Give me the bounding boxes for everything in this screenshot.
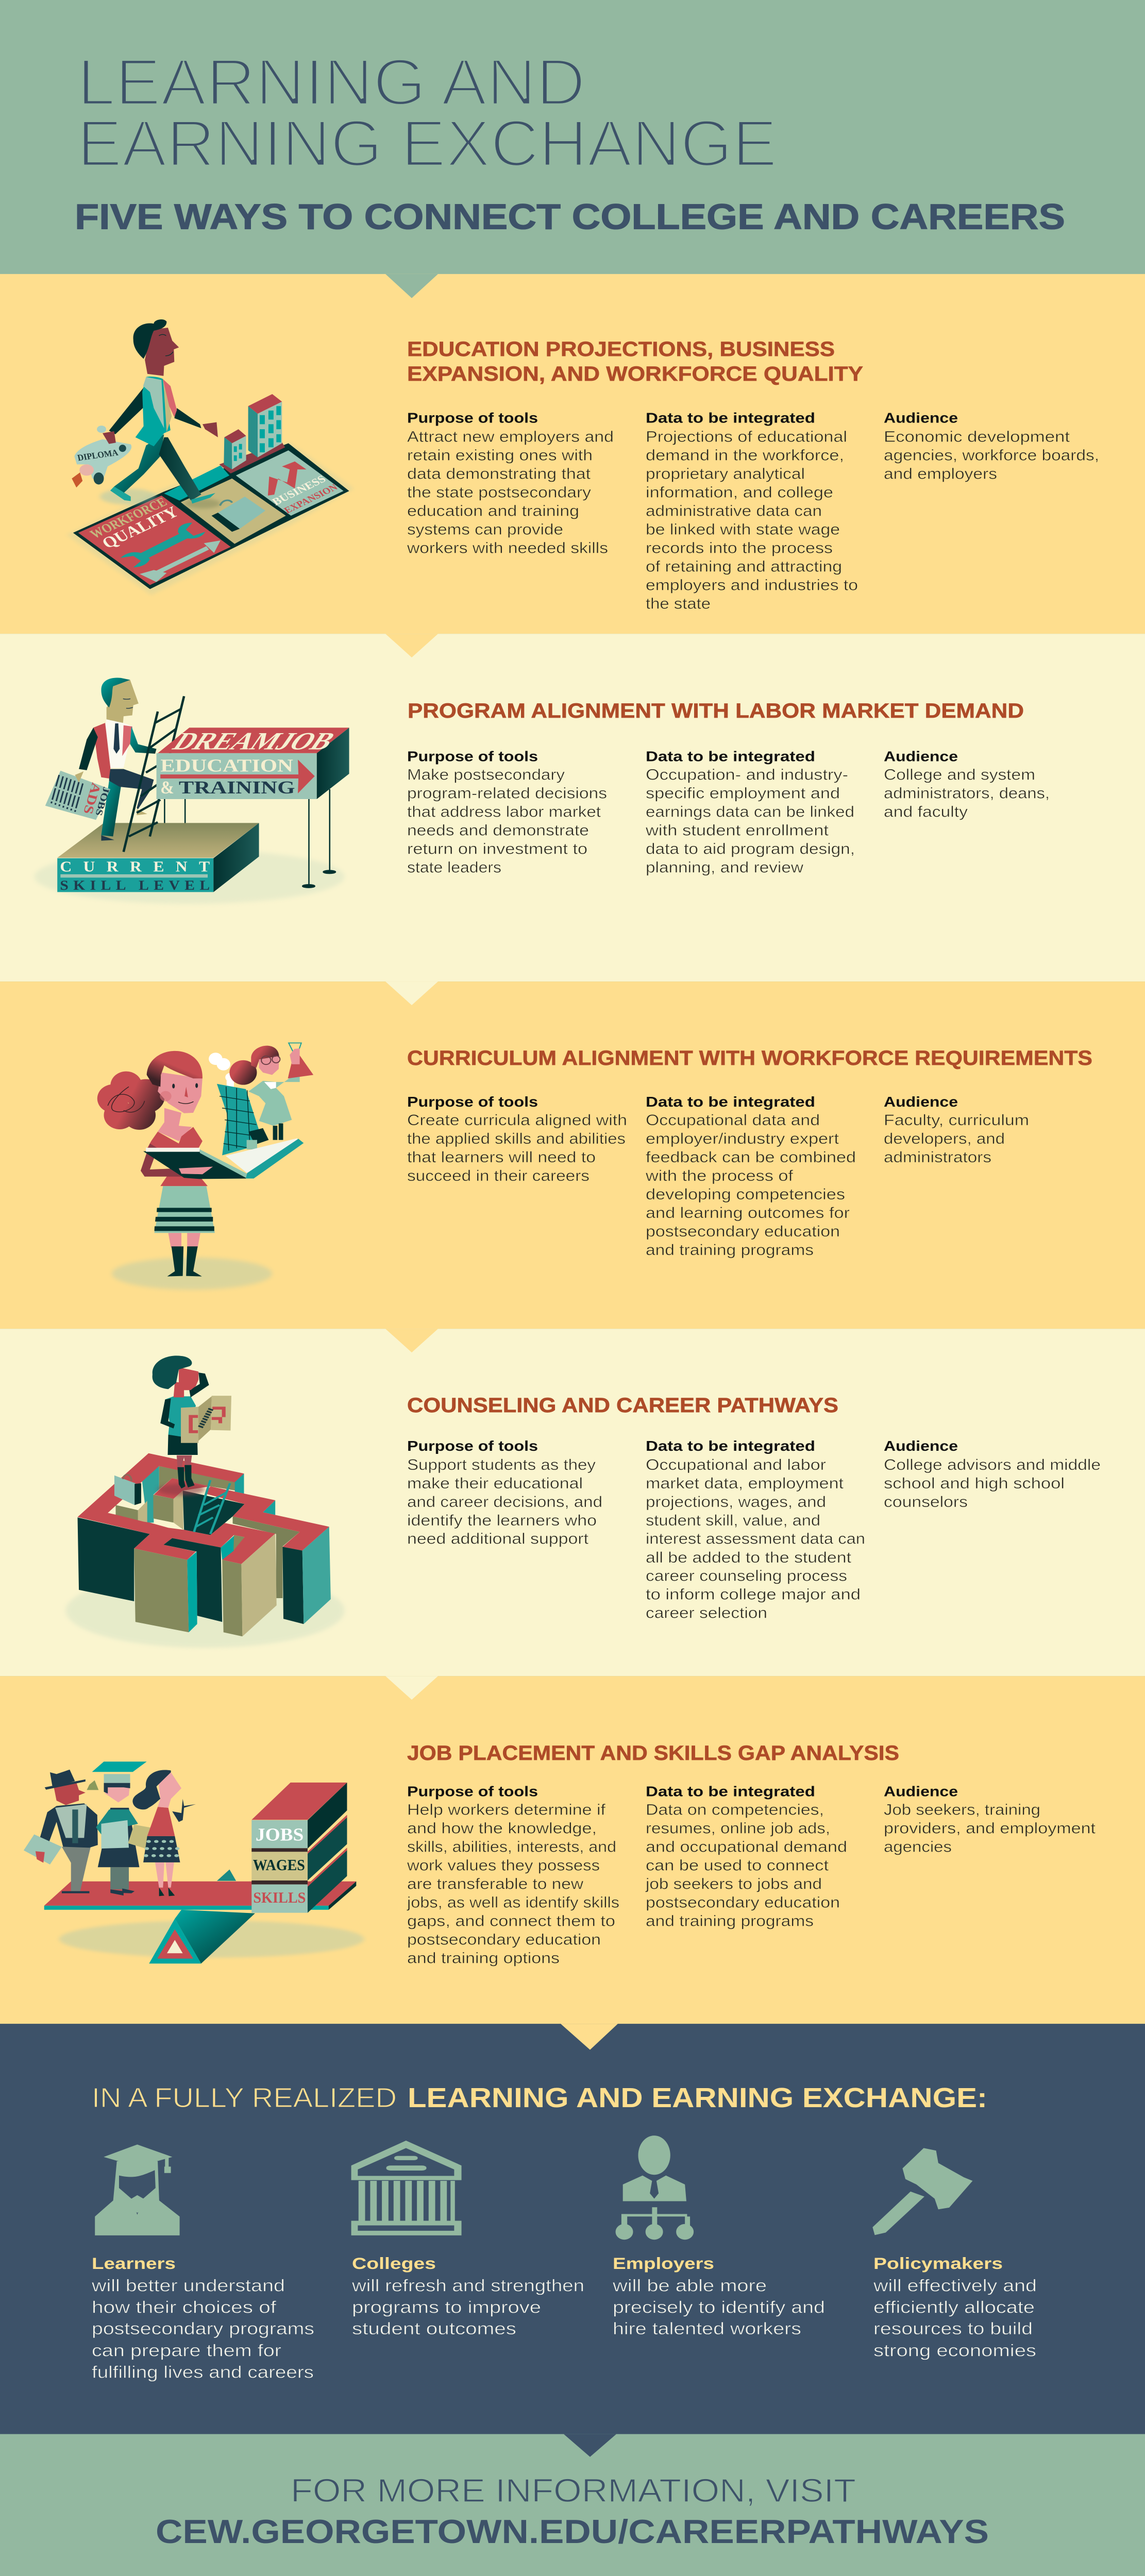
learners text: Learners: [92, 2255, 176, 2273]
section 2 column: data to be integrated: with student enrollment: [645, 822, 829, 839]
section 3 column: audience: administrators: [884, 1149, 991, 1166]
colleges text: student outcomes: [352, 2319, 516, 2338]
colleges text: will refresh and strengthen: [351, 2276, 584, 2295]
section 5 column: purpose of tools: Help workers determine if: [407, 1801, 605, 1818]
icon: employer: [616, 2136, 694, 2240]
panel: section 3 background: [0, 981, 1145, 1329]
section 4 column: purpose of tools: make their educational: [407, 1475, 583, 1492]
section 3 column: audience: Audience: [884, 1094, 958, 1110]
employers text: hire talented workers: [613, 2319, 801, 2338]
section 1 column: data to be integrated: information, and college: [646, 484, 833, 501]
policymakers text: [873, 2255, 1037, 2360]
board text: workforce quality: WORKFORCE: [87, 495, 170, 541]
title: EARNING EXCHANGE: [77, 107, 777, 180]
section 5 column: data to be integrated: job seekers to jobs and: [645, 1875, 822, 1892]
section 4 column: purpose of tools: and career decisions, and: [407, 1493, 602, 1510]
section 2 column: purpose of tools: Make postsecondary: [407, 766, 565, 783]
section 1 column: data to be integrated: [646, 410, 858, 612]
stacked blocks: jobs, wages, skills: [251, 1783, 347, 1913]
section 3 column: data to be integrated: Data to be integrated: [646, 1094, 815, 1110]
section 5 column: data to be integrated: can be used to connect: [646, 1857, 829, 1874]
section 3 column: data to be integrated: and learning outcomes for: [646, 1205, 850, 1222]
icon: college: [351, 2141, 462, 2235]
stacked blocks: jobs, wages, skills: WAGES: [253, 1856, 305, 1874]
section 2 column: data to be integrated: data to aid program design,: [646, 840, 855, 857]
section 5 column: data to be integrated: Data on competencies,: [646, 1801, 824, 1818]
section 1 column: purpose of tools: [407, 410, 614, 556]
section 3 column: data to be integrated: employer/industry expert: [646, 1130, 839, 1147]
section 3 column: audience: [884, 1094, 1029, 1166]
board text: business expansion: [268, 462, 340, 516]
section 4 column: data to be integrated: career counseling process: [646, 1567, 847, 1584]
section 4 column: audience: school and high school: [884, 1475, 1065, 1492]
section 4 column: data to be integrated: market data, employment: [646, 1475, 844, 1492]
panel: footer background: [0, 2434, 1145, 2576]
section 5 column: audience: agencies: [884, 1838, 952, 1855]
section 3 heading: CURRICULUM ALIGNMENT WITH WORKFORCE REQUIREMENTS: [407, 1046, 1092, 1070]
section 1 column: purpose of tools: the state postsecondary: [407, 484, 591, 501]
section 2 heading: PROGRAM ALIGNMENT WITH LABOR MARKET DEMAND: [408, 699, 1024, 722]
section 3 column: purpose of tools: that learners will need to: [407, 1149, 596, 1166]
section 1 column: data to be integrated: demand in the workforce,: [646, 447, 844, 464]
section 5 column: purpose of tools: postsecondary education: [407, 1931, 601, 1948]
arrow: header to section 1: [385, 274, 438, 298]
section 1 column: data to be integrated: of retaining and attracting: [646, 558, 842, 575]
figure: woman: [97, 1051, 215, 1277]
section 1 column: data to be integrated: be linked with state wage: [646, 521, 840, 538]
section 4 column: purpose of tools: Support students as they: [407, 1456, 596, 1473]
section 4 column: data to be integrated: [646, 1438, 865, 1621]
skill level platform: SKILL LEVEL: [60, 878, 210, 893]
section 2 column: purpose of tools: return on investment to: [407, 840, 587, 857]
section 3 column: purpose of tools: Purpose of tools: [407, 1094, 538, 1110]
figure: small scientist: [229, 1043, 313, 1140]
exchange panel heading: LEARNING AND EARNING EXCHANGE:: [408, 2082, 987, 2113]
board text: business expansion: EXPANSION: [282, 482, 340, 516]
section 4 column: purpose of tools: Purpose of tools: [407, 1438, 538, 1454]
section 1 column: audience: and employers: [884, 465, 997, 482]
section 2 column: purpose of tools: needs and demonstrate: [407, 822, 589, 839]
section 2 column: audience: College and system: [884, 766, 1035, 783]
section 4 column: data to be integrated: all be added to the student: [646, 1549, 851, 1566]
section 4 column: audience: College advisors and middle: [884, 1456, 1101, 1473]
section 5 column: audience: Audience: [884, 1784, 958, 1800]
arrow: section 5 to exchange panel: [561, 2024, 618, 2050]
skill level platform: [57, 823, 259, 893]
section 1 column: audience: [884, 410, 1099, 482]
game board: [73, 442, 349, 589]
section 1 column: audience: Audience: [884, 410, 958, 426]
section 5 column: purpose of tools: work values they possess: [407, 1857, 600, 1874]
figure: graduate: [87, 1761, 169, 1895]
section 1 column: purpose of tools: workers with needed skills: [407, 539, 608, 556]
section 2 column: purpose of tools: that address labor market: [407, 803, 601, 820]
section 4 column: audience: [884, 1438, 1101, 1510]
icon: gavel: [872, 2148, 972, 2235]
section 1 column: data to be integrated: records into the process: [646, 539, 833, 556]
section 3 column: data to be integrated: Occupational data and: [646, 1112, 820, 1129]
employers text: precisely to identify and: [613, 2298, 825, 2317]
figure: woman with bag: [132, 1770, 196, 1896]
colleges text: Colleges: [352, 2255, 436, 2273]
section 4 column: data to be integrated: interest assessment data can: [646, 1530, 865, 1547]
policymakers text: strong economies: [873, 2341, 1036, 2360]
section 5 heading: JOB PLACEMENT AND SKILLS GAP ANALYSIS: [407, 1741, 899, 1765]
stacked blocks: jobs, wages, skills: JOBS: [256, 1825, 304, 1844]
section 5 column: purpose of tools: [407, 1784, 619, 1967]
section 3 column: data to be integrated: developing competencies: [646, 1186, 845, 1203]
icon: learner: [95, 2144, 180, 2235]
section 3 column: data to be integrated: with the process of: [645, 1167, 793, 1184]
policymakers text: resources to build: [873, 2319, 1033, 2338]
arrow: section 4 to section 5: [385, 1676, 438, 1700]
section 1 column: data to be integrated: employers and industries to: [646, 577, 858, 594]
ladder: [194, 1480, 230, 1534]
illustration: woman with map on maze: [66, 1355, 344, 1648]
section 3 column: audience: developers, and: [884, 1130, 1005, 1147]
section 4 column: data to be integrated: projections, wages, and: [646, 1493, 826, 1510]
subtitle: FIVE WAYS TO CONNECT COLLEGE AND CAREERS: [75, 197, 1065, 237]
open book: [143, 1138, 304, 1179]
section 1 column: audience: agencies, workforce boards,: [884, 447, 1099, 464]
learners text: postsecondary programs: [92, 2319, 314, 2338]
panel: section 4 background: [0, 1329, 1145, 1676]
section 1 heading: [407, 337, 863, 385]
section 3 column: data to be integrated: postsecondary education: [646, 1223, 840, 1240]
dream job sign: DREAMJOB: [167, 728, 341, 755]
section 2 column: data to be integrated: [645, 749, 855, 876]
employers text: [612, 2255, 825, 2338]
dream job sign: &: [160, 777, 174, 798]
section 2 column: audience: [884, 749, 1050, 820]
ground shadow: [66, 1573, 344, 1648]
policymakers text: will effectively and: [873, 2276, 1037, 2295]
learners text: how their choices of: [92, 2298, 276, 2317]
arrow: section 2 to section 3: [385, 981, 438, 1005]
section 2 column: purpose of tools: state leaders: [407, 859, 501, 876]
exchange panel heading: IN A FULLY REALIZED: [92, 2082, 397, 2113]
section 1 column: data to be integrated: Projections of educational: [646, 428, 847, 445]
section 5 column: purpose of tools: Purpose of tools: [407, 1784, 538, 1800]
panel: section 5 background: [0, 1676, 1145, 2024]
section 1 column: purpose of tools: Attract new employers and: [407, 428, 614, 445]
learners text: can prepare them for: [92, 2341, 281, 2360]
figure: walking man: [72, 319, 221, 509]
section 1 column: data to be integrated: the state: [646, 595, 711, 612]
section 3 column: purpose of tools: succeed in their careers: [407, 1167, 590, 1184]
icon: briefcase: [211, 497, 265, 532]
ground shadow: [112, 1258, 272, 1290]
learners text: [91, 2255, 314, 2382]
section 1 column: purpose of tools: systems can provide: [407, 521, 563, 538]
panel: section 1 background: [0, 274, 1145, 634]
section 4 column: data to be integrated: Occupational and labor: [646, 1456, 826, 1473]
panel: section 2 background: [0, 634, 1145, 981]
header panel: [0, 0, 1145, 274]
section 1 column: purpose of tools: retain existing ones with: [407, 447, 593, 464]
panel: fully realized exchange background: [0, 2024, 1145, 2434]
section 5 column: audience: Job seekers, training: [884, 1801, 1040, 1818]
arrow: exchange panel to footer: [564, 2434, 616, 2457]
section 5 column: purpose of tools: jobs, as well as identify skills: [407, 1894, 619, 1911]
section 2 column: data to be integrated: Occupation- and industry-: [646, 766, 848, 783]
section 1 column: data to be integrated: administrative data can: [646, 502, 822, 519]
icon: briefcase: [114, 1475, 141, 1505]
colleges text: programs to improve: [352, 2298, 541, 2317]
figure: man with job ads: JOBS: [93, 786, 112, 817]
illustration: people balancing jobs wages skills: [24, 1761, 364, 1963]
policymakers text: Policymakers: [873, 2255, 1003, 2273]
section 3 column: data to be integrated: feedback can be combined: [646, 1149, 856, 1166]
icon: buildings: [224, 394, 282, 469]
section 2 column: purpose of tools: Purpose of tools: [407, 749, 538, 765]
section 1 column: data to be integrated: proprietary analytical: [646, 465, 805, 482]
illustration: woman with open book: [97, 1043, 313, 1290]
ground shadow: [59, 1921, 364, 1958]
arrow: section 1 to section 2: [385, 634, 438, 657]
figure: woman with map: [153, 1355, 231, 1495]
section 4 column: data to be integrated: to inform college major and: [646, 1586, 861, 1603]
section 4 column: audience: Audience: [884, 1438, 958, 1454]
maze blocks: [78, 1453, 331, 1636]
board shadow: [66, 442, 354, 595]
section 5 column: audience: [884, 1784, 1096, 1855]
section 5 column: purpose of tools: skills, abilities, interests, and: [407, 1838, 616, 1855]
board text: workforce quality: QUALITY: [98, 503, 182, 552]
section 1 heading: EXPANSION, AND WORKFORCE QUALITY: [407, 362, 863, 385]
section 4 column: purpose of tools: [407, 1438, 602, 1547]
cooling tower and steam: [209, 1053, 268, 1155]
footer call to action: [156, 2472, 989, 2550]
section 3 column: audience: Faculty, curriculum: [884, 1112, 1029, 1129]
figure: man in hat: [24, 1770, 98, 1893]
section 4 heading: COUNSELING AND CAREER PATHWAYS: [407, 1394, 838, 1417]
section 1 column: purpose of tools: education and training: [407, 502, 579, 519]
board text: business expansion: BUSINESS: [270, 473, 328, 507]
dream job sign: TRAINING: [179, 777, 295, 798]
figure: man with job ads: [45, 677, 157, 841]
seesaw plank and fulcrum: [44, 1870, 356, 1963]
section 4 column: purpose of tools: need additional support: [407, 1530, 588, 1547]
policymakers text: efficiently allocate: [873, 2298, 1035, 2317]
employers text: Employers: [613, 2255, 714, 2273]
section 5 column: data to be integrated: and occupational demand: [646, 1838, 847, 1855]
section 2 column: data to be integrated: planning, and review: [646, 859, 803, 876]
section 2 column: purpose of tools: program-related decisions: [407, 785, 607, 802]
section 1 column: audience: Economic development: [884, 428, 1070, 445]
section 1 column: data to be integrated: Data to be integrated: [646, 410, 815, 426]
dream job sign: EDUCATION: [160, 756, 293, 775]
learners text: fulfilling lives and careers: [92, 2363, 314, 2382]
section 2 column: data to be integrated: specific employment and: [646, 785, 840, 802]
section 3 column: purpose of tools: Create curricula aligned with: [407, 1112, 627, 1129]
illustration: man climbing ladder to dream job: [34, 677, 349, 904]
figure: man with job ads: ADS: [80, 781, 104, 816]
section 3 column: data to be integrated: and training programs: [646, 1242, 814, 1259]
figure: walking man: DIPLOMA: [76, 448, 120, 463]
section 5 column: audience: providers, and employment: [884, 1820, 1096, 1837]
section 5 column: data to be integrated: and training programs: [646, 1912, 814, 1929]
ladder: [124, 696, 184, 852]
skill level platform: CURRENT: [60, 858, 210, 875]
arrow: section 3 to section 4: [385, 1329, 438, 1352]
title: LEARNING AND: [77, 45, 585, 119]
dream job sign: [157, 727, 349, 799]
section 2 column: data to be integrated: Data to be integrated: [646, 749, 815, 765]
section 3 column: data to be integrated: [645, 1094, 856, 1259]
section 2 column: audience: Audience: [884, 749, 958, 765]
footer call to action: FOR MORE INFORMATION, VISIT: [291, 2472, 856, 2509]
title: [77, 45, 777, 180]
section 1 column: purpose of tools: Purpose of tools: [407, 410, 538, 426]
section 2 column: audience: and faculty: [884, 803, 968, 820]
learners text: will better understand: [91, 2276, 285, 2295]
ground shadow: [34, 850, 344, 904]
board text: workforce quality: [87, 495, 221, 582]
section 4 column: purpose of tools: identify the learners who: [407, 1512, 597, 1529]
section 4 column: data to be integrated: student skill, value, and: [646, 1512, 820, 1529]
section 4 column: data to be integrated: career selection: [646, 1604, 767, 1621]
section 2 column: data to be integrated: earnings data can be linked: [646, 803, 854, 820]
exchange panel heading: [92, 2082, 987, 2113]
sign posts: [158, 789, 335, 888]
employers text: will be able more: [612, 2276, 767, 2295]
section 5 column: data to be integrated: resumes, online job ads,: [646, 1820, 830, 1837]
section 1 heading: EDUCATION PROJECTIONS, BUSINESS: [407, 337, 835, 361]
section 2 column: purpose of tools: [407, 749, 607, 876]
section 2 column: audience: administrators, deans,: [884, 785, 1050, 802]
section 5 column: data to be integrated: [645, 1784, 847, 1929]
section 4 column: audience: counselors: [884, 1493, 968, 1510]
section 1 column: purpose of tools: data demonstrating that: [407, 465, 591, 482]
colleges text: [351, 2255, 584, 2338]
section 5 column: purpose of tools: and training options: [407, 1950, 560, 1967]
section 5 column: purpose of tools: and how the knowledge,: [407, 1820, 597, 1837]
section 3 column: purpose of tools: the applied skills and abilities: [407, 1130, 626, 1147]
section 5 column: purpose of tools: are transferable to new: [407, 1875, 583, 1892]
section 5 column: data to be integrated: Data to be integrated: [646, 1784, 815, 1800]
stacked blocks: jobs, wages, skills: SKILLS: [253, 1890, 306, 1906]
section 5 column: purpose of tools: gaps, and connect them to: [407, 1912, 615, 1929]
footer call to action: CEW.GEORGETOWN.EDU/CAREERPATHWAYS: [156, 2513, 989, 2550]
section 4 column: data to be integrated: Data to be integrated: [646, 1438, 815, 1454]
illustration: man walking over game board: [66, 319, 354, 595]
section 5 column: data to be integrated: postsecondary education: [646, 1894, 840, 1911]
section 3 column: purpose of tools: [407, 1094, 627, 1184]
